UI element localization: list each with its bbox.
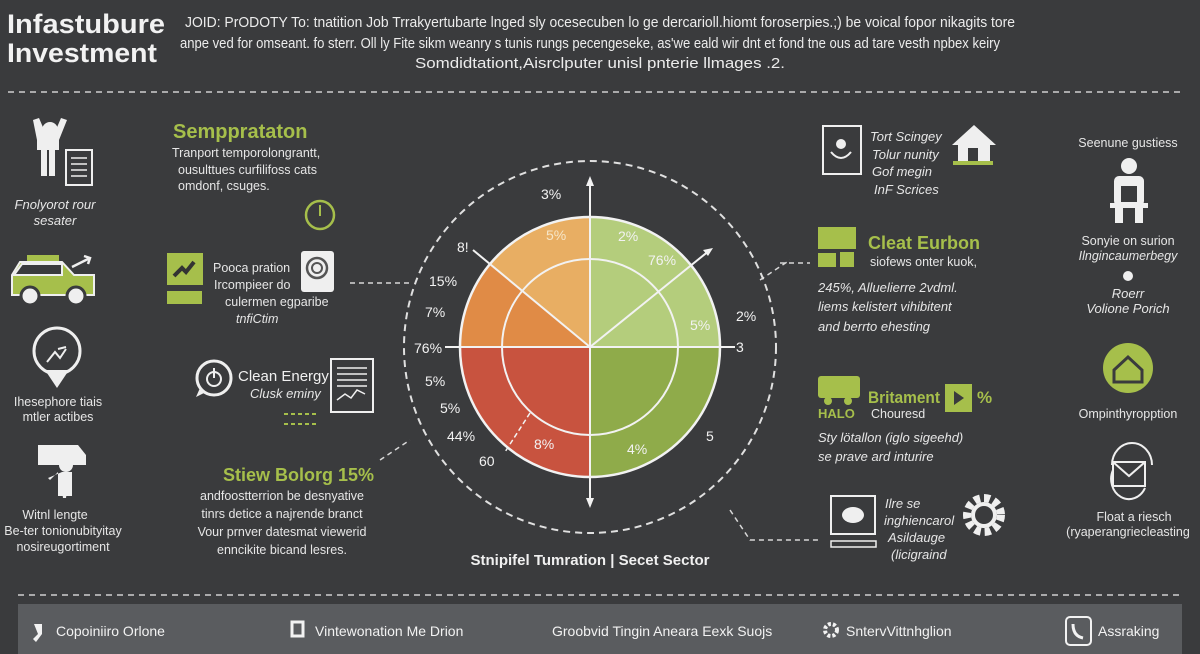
panel: cleat eurbon: liems kelistert vihibitent xyxy=(818,299,953,314)
panel: britament: HALO xyxy=(818,406,855,421)
chart: segmented circle xyxy=(404,161,776,533)
panel: stiew bolorg: enncikite bicand lesres. xyxy=(217,543,347,557)
chart: segmented circle: 7% xyxy=(425,304,445,320)
header paragraph: Somdidtationt,Aisrclputer unisl pnterie llmages .2. xyxy=(415,55,785,72)
icon: clock xyxy=(306,201,334,229)
panel: sempprataton: Sempprataton xyxy=(173,121,307,143)
chart: segmented circle: 4% xyxy=(627,441,647,457)
chart: segmented circle: 2% xyxy=(618,228,638,244)
footer bar: Vintewonation Me Drion xyxy=(315,623,463,639)
right column: Seenune gustiess xyxy=(1078,136,1178,150)
panel: tort scingey: Gof megin xyxy=(872,164,932,179)
panel: stiew bolorg: tinrs detice a najrende branct xyxy=(201,507,363,521)
icon: person with document xyxy=(33,118,92,185)
icon: map pin xyxy=(34,328,80,388)
title: Infastubure xyxy=(7,9,165,39)
panel: stiew bolorg: andfoostterrion be desnyative xyxy=(200,489,364,503)
panel: sempprataton: Tranport temporolongrantt, xyxy=(172,146,320,160)
panel: britament: Britament xyxy=(868,388,940,407)
footer bar: Assraking xyxy=(1098,623,1159,639)
text: left 3: mtler actibes xyxy=(23,410,93,424)
chart: segmented circle: 44% xyxy=(447,428,475,444)
title: Investment xyxy=(7,38,157,68)
connectors xyxy=(350,260,820,540)
panel: sempprataton: omdonf, csuges. xyxy=(178,179,270,193)
chart: segmented circle: 3 xyxy=(736,339,744,355)
right column xyxy=(1066,136,1190,539)
panel: britament: Sty lötallon (iglo sigeehd) xyxy=(818,430,963,445)
panel: monitor xyxy=(831,496,1001,562)
icon: power bubble xyxy=(196,361,231,397)
chart: segmented circle: 8! xyxy=(457,239,469,255)
panel: clean energy: Clean Energy xyxy=(238,368,329,385)
panel: pocca pration: Ircompieer do xyxy=(214,278,290,292)
chart: segmented circle: 76% xyxy=(648,252,676,268)
panel: cleat eurbon: siofews onter kuok, xyxy=(870,255,977,269)
icon: headset envelope xyxy=(1111,443,1152,499)
header paragraph xyxy=(180,14,1015,72)
text: left 4: Be-ter tonionubityitay xyxy=(4,524,122,538)
text: left 3: Ihesephore tiais xyxy=(14,395,102,409)
chart: segmented circle: 8% xyxy=(534,436,554,452)
panel: cleat eurbon: Cleat Eurbon xyxy=(868,233,980,253)
text: left 4 xyxy=(4,508,122,554)
chart: segmented circle: 5% xyxy=(546,227,566,243)
panel: stiew bolorg: Vour prnver datesmat viewerid xyxy=(198,525,366,539)
icon: gear xyxy=(967,498,1001,532)
right column: Roerr xyxy=(1112,286,1145,301)
panel: monitor: (licigraind xyxy=(891,547,947,562)
panel: clean energy xyxy=(196,359,373,424)
chart: segmented circle: 2% xyxy=(736,308,756,324)
panel: britament xyxy=(818,376,992,464)
panel: monitor: inghiencarol xyxy=(884,513,955,528)
text: left 1: sesater xyxy=(34,213,77,228)
icon: person at laptop xyxy=(1110,158,1148,223)
footer bar xyxy=(18,604,1182,654)
right column: Ompinthyropption xyxy=(1079,407,1177,421)
right column: Float a riesch xyxy=(1096,510,1172,524)
header paragraph: JOID: PrODOTY To: tnatition Job Trrakyertubarte lnged sly ocesecuben lo ge dercarioll.hiomt foroserpies.;) be voical fopor nikagits tore xyxy=(185,14,1015,31)
panel: cleat eurbon: and berrto ehesting xyxy=(818,319,931,334)
panel: stiew bolorg xyxy=(198,465,374,557)
panel: pocca pration: tnfiCtim xyxy=(236,312,278,326)
chart: segmented circle: 60 xyxy=(479,453,495,469)
panel: stiew bolorg: Stiew Bolorg 15% xyxy=(223,465,374,485)
title xyxy=(7,9,165,68)
panel: britament: se prave ard inturire xyxy=(818,449,934,464)
panel: pocca pration xyxy=(167,251,334,326)
text: left 1: Fnolyorot rour xyxy=(15,197,96,212)
panel: sempprataton: ousulttues curfilifoss cats xyxy=(178,163,317,177)
footer bar: Copoiniiro Orlone xyxy=(56,623,165,639)
footer bar: Groobvid Tingin Aneara Eexk Suojs xyxy=(552,623,772,639)
chart: segmented circle: 5 xyxy=(706,428,714,444)
panel: sempprataton xyxy=(172,121,334,229)
right column: (ryaperangriecleasting xyxy=(1066,525,1190,539)
icon: house circle xyxy=(1103,343,1153,393)
panel: pocca pration: Pooca pration xyxy=(213,261,290,275)
chart: segmented circle: 3% xyxy=(541,186,561,202)
panel: britament: Chouresd xyxy=(871,407,925,421)
panel: monitor: Ilre se xyxy=(885,496,920,511)
chart: segmented circle: 15% xyxy=(429,273,457,289)
left column xyxy=(4,118,122,554)
footer bar: SntervVittnhglion xyxy=(846,623,952,639)
right column: Ilngincaumerbegy xyxy=(1079,249,1178,263)
panel: pocca pration: culermen egparibe xyxy=(225,295,329,309)
chart: segmented circle: 76% xyxy=(414,340,442,356)
text: left 4: nosireugortiment xyxy=(16,540,110,554)
panel: monitor: Asildauge xyxy=(887,530,945,545)
right column: Sonyie on surion xyxy=(1081,234,1175,248)
panel: cleat eurbon: 245%, Alluelierre 2vdml. xyxy=(817,280,958,295)
panel: cleat eurbon xyxy=(817,227,980,334)
panel: clean energy: Clusk eminy xyxy=(250,386,322,401)
panel: tort scingey: Tort Scingey xyxy=(870,129,943,144)
right column: Volione Porich xyxy=(1086,301,1170,316)
chart: segmented circle: 5% xyxy=(440,400,460,416)
chart caption: Stnipifel Tumration | Secet Sector xyxy=(471,552,710,569)
text: left 1 xyxy=(15,197,96,228)
icon: car xyxy=(12,255,94,305)
header paragraph: anpe ved for omseant. fo sterr. Oll ly Fite sikm weanry s tunis rungs pecengeseke, as'we eald wir dnt et fond tne ous ad tare vesth npbex keiry xyxy=(180,35,1000,52)
text: left 4: Witnl lengte xyxy=(22,508,88,522)
icon: worker xyxy=(38,445,86,498)
chart: segmented circle: 5% xyxy=(425,373,445,389)
text: left 3 xyxy=(14,395,102,424)
panel: tort scingey: InF Scrices xyxy=(874,182,939,197)
panel: britament: % xyxy=(977,388,992,407)
chart: segmented circle: 5% xyxy=(690,317,710,333)
panel: tort scingey: Tolur nunity xyxy=(872,147,940,162)
panel: tort scingey xyxy=(823,125,996,197)
